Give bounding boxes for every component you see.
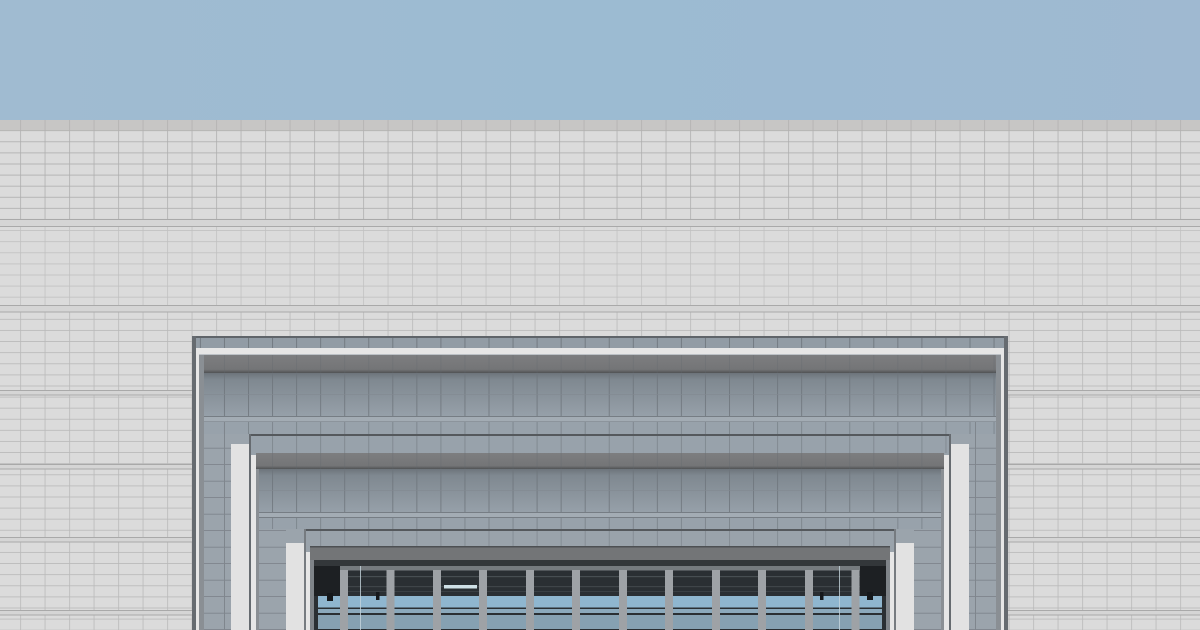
sky (0, 0, 1200, 120)
glass: lower panes (318, 609, 882, 613)
third soffit (310, 546, 890, 560)
corner shadows (314, 566, 340, 596)
window band (314, 560, 886, 630)
left white pillar, level one (231, 444, 249, 630)
stone course bands (0, 219, 1200, 615)
white outer trim (196, 348, 1004, 354)
second inner wall (259, 469, 941, 630)
cable lines (359, 566, 362, 630)
left white pillar, level two (286, 543, 304, 630)
third recessed portal (304, 529, 896, 630)
second soffit (256, 453, 944, 469)
first inner wall (204, 373, 996, 630)
right white pillar, level two (896, 543, 914, 630)
window cleaners (327, 592, 873, 601)
second recessed portal (249, 434, 951, 630)
outer recessed portal (192, 336, 1008, 630)
outer soffit (199, 355, 1001, 373)
mullions (340, 570, 860, 630)
lintel (314, 560, 886, 566)
right white pillar, level one (951, 444, 969, 630)
bright slot (444, 585, 477, 588)
glass: sky reflection (318, 596, 882, 608)
